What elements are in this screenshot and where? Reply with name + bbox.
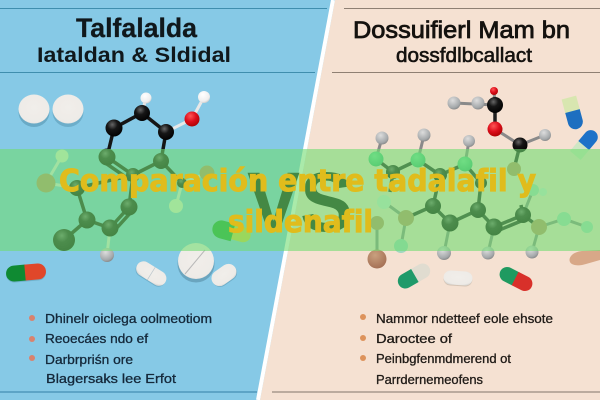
translucent green title band [0, 149, 600, 251]
icon: white oval pill left [133, 258, 169, 290]
right molecule [368, 87, 593, 268]
left header rules [0, 8, 327, 72]
panel: right peach background [260, 0, 600, 400]
big VS lettering: VS [247, 155, 353, 249]
left heading: Talfalalda [76, 13, 198, 43]
right heading: dossfdlbcallact [396, 45, 532, 67]
diagonal white divider [258, 0, 333, 400]
right bullet list: Parrdernemeofens [376, 372, 483, 387]
left bullet list: Reoecáes ndo ef [45, 331, 148, 346]
left molecule [36, 91, 214, 262]
left bullet list: Blagersaks lee Erfot [46, 371, 176, 386]
title: sildenafil [228, 205, 373, 240]
icon: green and white capsule right [395, 261, 433, 291]
icon: small oval pill left [208, 261, 240, 290]
right header rules [332, 8, 600, 72]
title [59, 164, 536, 240]
right bullet list [360, 311, 553, 387]
left heading [37, 13, 231, 67]
icon: white oval pill right [443, 270, 473, 287]
icon: green and yellow capsule in band [210, 218, 253, 246]
right heading: Dossuifierl Mam bn [353, 17, 570, 44]
right heading [353, 17, 570, 67]
icon: blue capsules top right [562, 96, 600, 160]
right bullet list: Nammor ndetteef eole ehsote [376, 311, 553, 326]
icon: green and red capsule left [5, 263, 47, 283]
icon: two round white tablets [18, 94, 84, 127]
bottom rule right [272, 391, 600, 393]
bottom rule left [0, 391, 257, 393]
icon: large round scored tablet [178, 243, 214, 282]
title: Comparación entre tadalafil y [59, 164, 536, 199]
left bullet list [29, 311, 212, 386]
left bullet list: Darbrpriśn ore [45, 352, 133, 367]
icon: brown pill cut by right edge [570, 250, 600, 265]
left bullet list: Dhinelr oiclega oolmeotiom [45, 311, 212, 326]
right bullet list: Peinbgfenmdmerend ot [376, 351, 511, 366]
right bullet list: Daroctee of [376, 331, 452, 346]
left heading: Iataldan & Sldidal [37, 44, 231, 67]
icon: green and red capsule right [497, 264, 535, 294]
